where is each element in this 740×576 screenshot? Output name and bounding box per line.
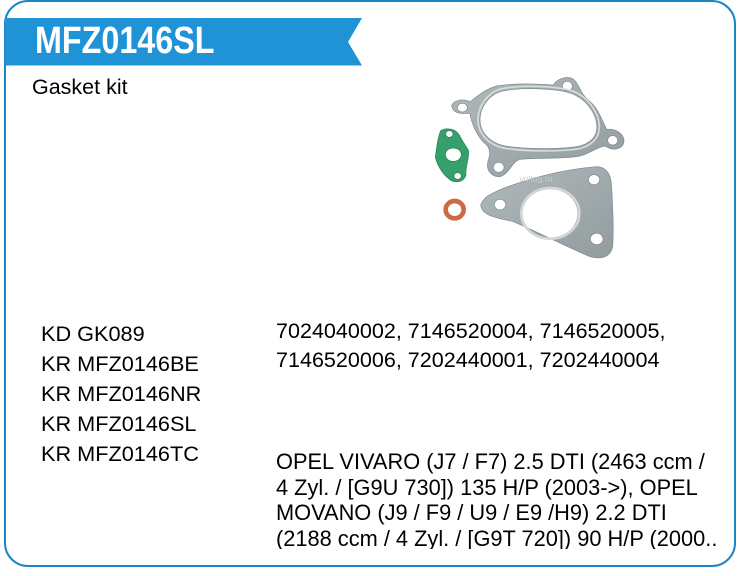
text: OEM numbers [276,318,665,372]
icon: copper washer [446,201,464,218]
subtitle: Gasket kit [32,75,128,99]
text: vehicle applications: OPEL VIVARO (J7 / F7) 2.5 DTI (2463 ccm / [276,449,705,474]
title: MFZ0146SL [35,20,214,62]
icon: green oil gasket [435,129,469,182]
list: cross-reference part codes: KR MFZ0146TC [41,441,199,466]
list: cross-reference part codes: KD GK089 [41,321,145,346]
text: OEM numbers: 7146520006, 7202440001, 7202440004 [276,346,659,372]
icon: lower turbo gasket [481,167,613,258]
banner: title ribbon [5,18,362,66]
image: gasket kit photo [435,77,624,258]
list: cross-reference part codes: KR MFZ0146NR [41,381,201,406]
text: vehicle applications: 4 Zyl. / [G9U 730]) 135 H/P (2003->), OPEL [276,475,698,500]
watermark: voltag.ru [519,174,553,184]
list: cross-reference part codes [41,321,201,466]
text: vehicle applications [276,449,717,549]
icon: upper exhaust gasket [452,78,624,177]
text: vehicle applications: MOVANO (J9 / F9 / U9 / E9 /H9) 2.2 DTI [276,500,667,525]
list: cross-reference part codes: KR MFZ0146SL [41,411,196,436]
list: cross-reference part codes: KR MFZ0146BE [41,351,199,376]
text: OEM numbers: 7024040002, 7146520004, 7146520005, [276,318,665,343]
